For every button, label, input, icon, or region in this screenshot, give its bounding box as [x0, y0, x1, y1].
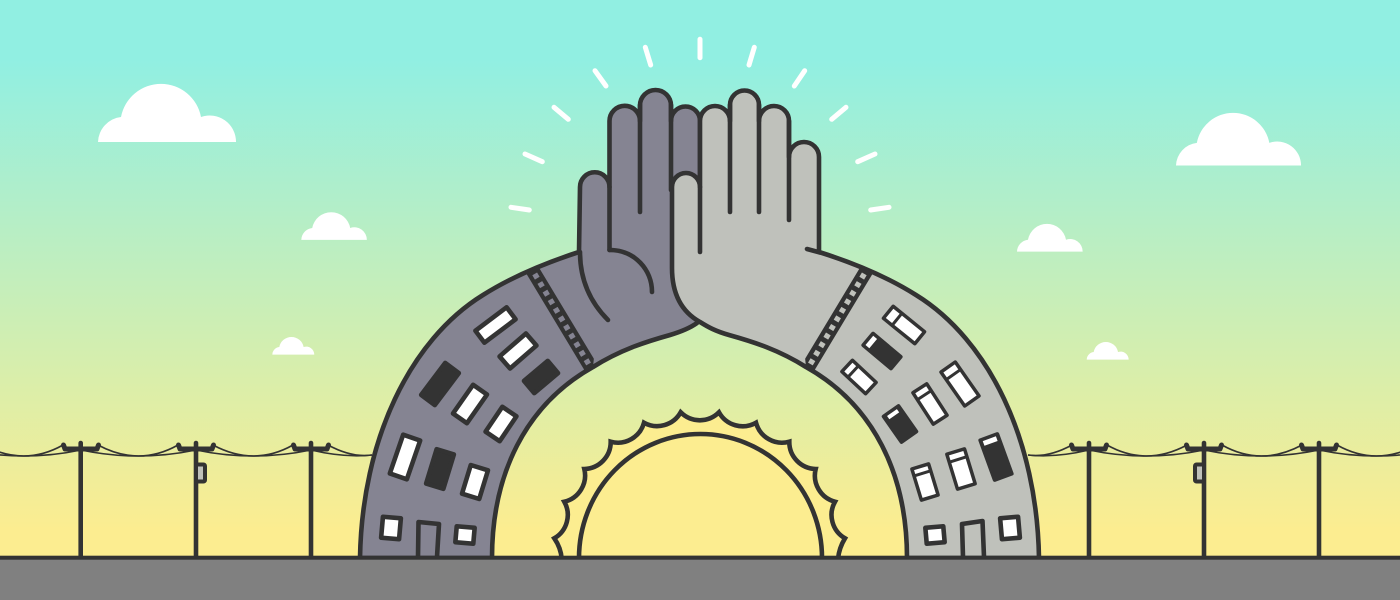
road [0, 558, 1400, 600]
window R3 [839, 358, 879, 396]
wires right [1028, 445, 1400, 456]
window R1 [881, 304, 927, 346]
pole 1 [64, 443, 98, 557]
right hand details [700, 105, 820, 252]
window R5 [910, 381, 950, 427]
ground line [0, 556, 1400, 560]
sun [554, 412, 845, 559]
clouds [98, 84, 1301, 360]
right building arm and hand [672, 90, 1039, 558]
cloud: small left [272, 337, 314, 355]
sun disc [579, 434, 822, 558]
rays around the high five [511, 39, 889, 210]
pole 6 [1302, 443, 1336, 557]
cloud: large right [1176, 113, 1301, 166]
left windows [381, 307, 558, 557]
pole 3 [294, 443, 328, 557]
window R6 [881, 403, 919, 445]
transformer box left [196, 464, 205, 482]
right arm and hand shape [672, 90, 1039, 558]
right windows [839, 304, 1020, 557]
power lines right [1028, 443, 1400, 557]
power lines left [0, 443, 372, 557]
cloud: large left [98, 84, 236, 142]
left arm and hand shape [360, 90, 700, 558]
pole 5 [1186, 443, 1222, 557]
left building arm and hand [360, 90, 700, 558]
pole 4 [1072, 443, 1106, 557]
window R10 [1000, 517, 1020, 539]
left seam [530, 266, 594, 372]
cloud: medium right [1017, 224, 1083, 252]
cloud: small right [1087, 342, 1129, 360]
pole 2 [178, 443, 214, 557]
left hand details [580, 105, 671, 320]
transformer box right [1195, 464, 1204, 482]
window R4 [938, 360, 982, 408]
door right [962, 521, 984, 557]
window R11 [925, 526, 945, 544]
window row 2 [421, 363, 516, 441]
window row 4 and door [381, 517, 475, 557]
window R2 [861, 331, 903, 371]
window row 3 [390, 435, 488, 499]
ground [0, 556, 1400, 600]
sun rays scalloped edge [554, 412, 845, 559]
window row 1 [475, 307, 558, 393]
window R7 [978, 432, 1014, 482]
window R8 [945, 447, 977, 491]
cloud: medium left [301, 212, 367, 240]
wires left [0, 445, 372, 456]
window R9 [910, 462, 940, 502]
right seam [805, 266, 869, 372]
